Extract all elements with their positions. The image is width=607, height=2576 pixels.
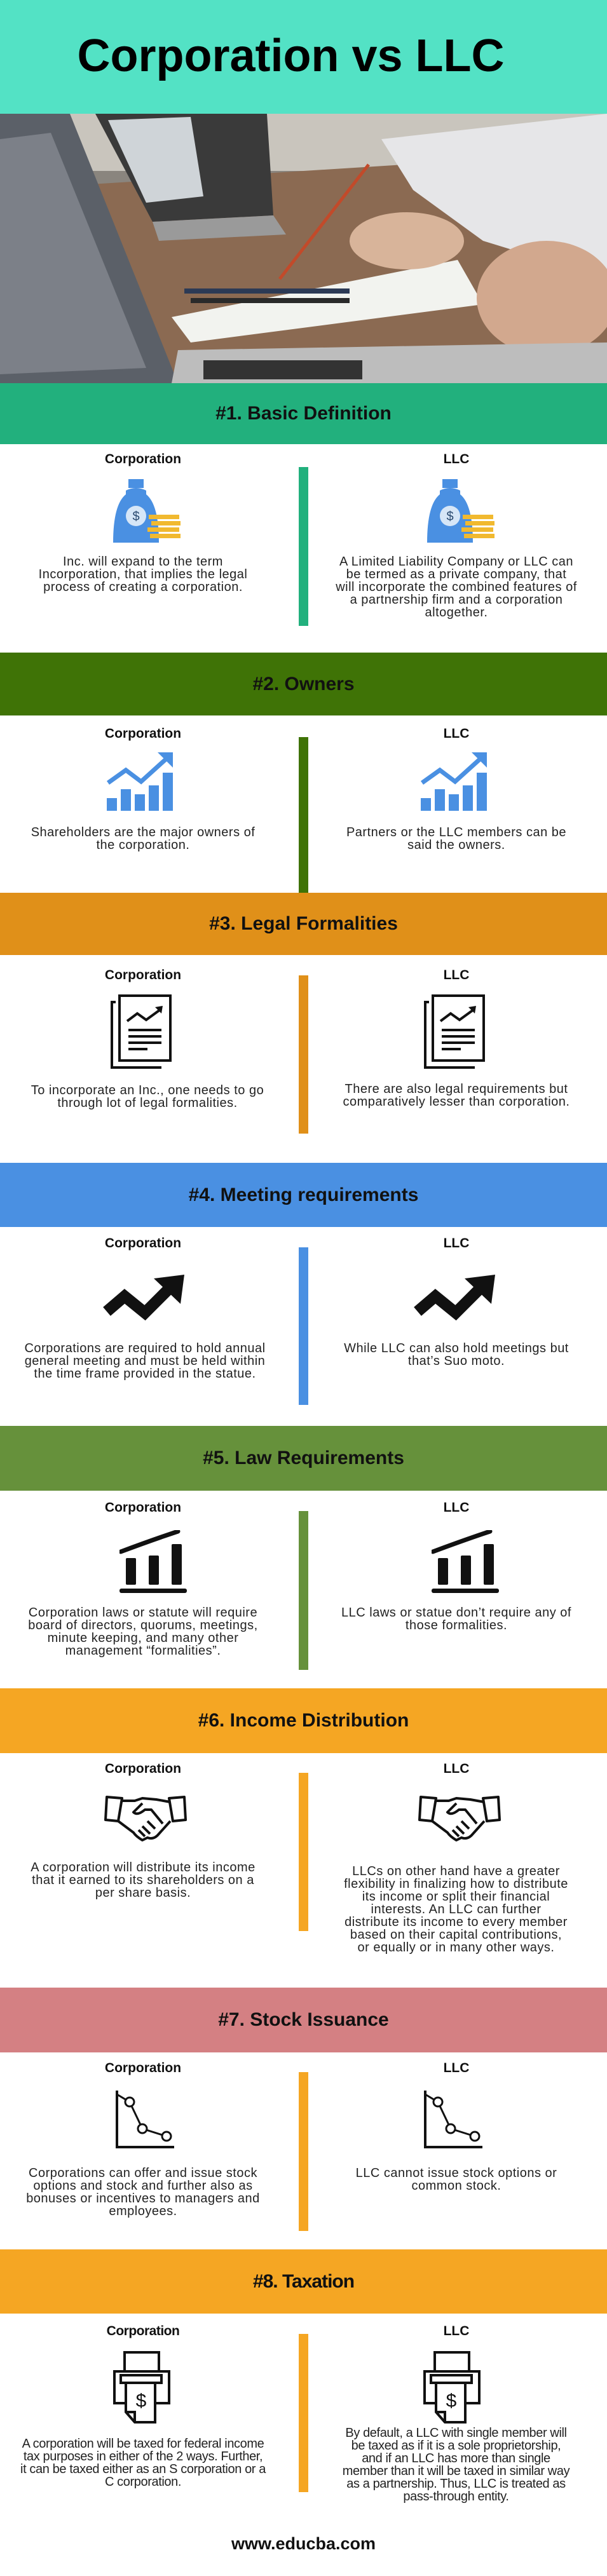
s3 divider bbox=[299, 975, 308, 1134]
s7 divider bbox=[299, 2072, 308, 2231]
s2 icon growth chart right bbox=[421, 752, 487, 811]
s1 icon money bag right: $ bbox=[446, 510, 454, 524]
s3 corporation text: To incorporate an Inc., one needs to go through lot of legal formalities. bbox=[31, 1083, 264, 1110]
section 2 band: #2. Owners bbox=[252, 674, 355, 694]
section 6 band: #6. Income Distribution bbox=[198, 1710, 409, 1731]
s5 corporation heading: Corporation bbox=[105, 1500, 181, 1515]
s7 icon declining chart left bbox=[116, 2091, 174, 2148]
s8 icon printer money left: $ bbox=[136, 2390, 147, 2411]
s7 corporation text: Corporations can offer and issue stock options and stock and further also as bonuses or incentives to managers and employees. bbox=[26, 2166, 260, 2218]
s6 icon handshake left bbox=[104, 1796, 187, 1841]
s7 llc text: LLC cannot issue stock options or common stock. bbox=[356, 2166, 557, 2193]
s7 icon declining chart right bbox=[424, 2091, 482, 2148]
s8 llc heading: LLC bbox=[444, 2324, 469, 2338]
section 6 band bbox=[0, 1688, 607, 1753]
s5 llc heading: LLC bbox=[444, 1500, 469, 1515]
section 7 band bbox=[0, 1988, 607, 2052]
s8 corporation text: A corporation will be taxed for federal income tax purposes in either of the 2 ways. Further, it can be taxed either as an S corporation or a C corporation. bbox=[20, 2437, 266, 2489]
s3 llc text: There are also legal requirements but comparatively lesser than corporation. bbox=[343, 1082, 569, 1109]
s6 corporation heading: Corporation bbox=[105, 1761, 181, 1776]
section 4 band: #4. Meeting requirements bbox=[189, 1184, 418, 1205]
section 1 band: #1. Basic Definition bbox=[215, 403, 392, 424]
s2 icon growth chart left bbox=[107, 752, 173, 811]
s4 llc text: While LLC can also hold meetings but that’s Suo moto. bbox=[344, 1341, 569, 1368]
s5 icon bar chart left bbox=[119, 1530, 187, 1593]
s4 divider bbox=[299, 1247, 308, 1405]
s8 llc text: By default, a LLC with single member will be taxed as if it is a sole proprietorship, and if an LLC has more than single member than it will be taxed in similar way as a partnership. Thus, LLC is treated as pass-through entity. bbox=[343, 2426, 569, 2504]
s7 corporation heading: Corporation bbox=[105, 2061, 181, 2075]
s8 icon printer money right: $ bbox=[446, 2390, 457, 2411]
section 5 band: #5. Law Requirements bbox=[203, 1447, 404, 1468]
s6 icon handshake right bbox=[418, 1796, 501, 1841]
s4 icon zigzag arrow left bbox=[103, 1275, 184, 1320]
s7 llc heading: LLC bbox=[444, 2061, 469, 2075]
s2 corporation text: Shareholders are the major owners of the corporation. bbox=[31, 825, 255, 852]
s8 divider bbox=[299, 2334, 308, 2492]
s5 llc text: LLC laws or statue don’t require any of those formalities. bbox=[341, 1606, 571, 1632]
section 5 band bbox=[0, 1426, 607, 1491]
section 7 band: #7. Stock Issuance bbox=[218, 2009, 389, 2030]
section 2 band bbox=[0, 653, 607, 715]
s1 icon money bag left: $ bbox=[132, 510, 140, 524]
s3 corporation heading: Corporation bbox=[105, 968, 181, 982]
s6 llc heading: LLC bbox=[444, 1761, 469, 1776]
s1 corporation heading: Corporation bbox=[105, 452, 181, 466]
section 1 band bbox=[0, 383, 607, 444]
s5 corporation text: Corporation laws or statute will require board of directors, quorums, meetings, minute keeping, and many other management “formalities”. bbox=[28, 1606, 258, 1658]
s2 llc text: Partners or the LLC members can be said the owners. bbox=[346, 825, 566, 852]
s4 llc heading: LLC bbox=[444, 1236, 469, 1251]
s8 icon printer money left bbox=[113, 2351, 170, 2423]
s6 divider bbox=[299, 1773, 308, 1931]
s1 llc heading: LLC bbox=[444, 452, 469, 466]
s1 llc text: A Limited Liability Company or LLC can be termed as a private company, that will incorporate the combined features of a partnership firm and a corporation altogether. bbox=[336, 555, 577, 620]
s5 icon bar chart right bbox=[432, 1530, 499, 1593]
s6 llc text: LLCs on other hand have a greater flexibility in finalizing how to distribute its income or split their financial interests. An LLC can further distribute its income to every member based on their capital contributions, or equally or in many other ways. bbox=[344, 1864, 568, 1955]
s3 llc heading: LLC bbox=[444, 968, 469, 982]
section 8 band: #8. Taxation bbox=[253, 2271, 354, 2291]
s8 icon printer money right bbox=[423, 2351, 481, 2423]
title band: Corporation vs LLC bbox=[77, 31, 505, 81]
s4 corporation text: Corporations are required to hold annual general meeting and must be held within the time frame provided in the statue. bbox=[24, 1341, 266, 1381]
s1 icon money bag left bbox=[113, 479, 181, 543]
section 3 band: #3. Legal Formalities bbox=[209, 913, 398, 934]
section 3 band bbox=[0, 893, 607, 955]
footer url: www.educba.com bbox=[231, 2534, 376, 2553]
s4 icon zigzag arrow right bbox=[414, 1275, 495, 1320]
s1 divider bbox=[299, 467, 308, 626]
s5 divider bbox=[299, 1511, 308, 1670]
s1 corporation text: Inc. will expand to the term Incorporation, that implies the legal process of creating a corporation. bbox=[39, 555, 247, 594]
s3 icon document right bbox=[424, 994, 485, 1069]
s8 corporation heading: Corporation bbox=[107, 2324, 179, 2338]
title band bbox=[0, 0, 607, 114]
s2 llc heading: LLC bbox=[444, 726, 469, 741]
section 8 band bbox=[0, 2249, 607, 2314]
s6 corporation text: A corporation will distribute its income that it earned to its shareholders on a per share basis. bbox=[31, 1861, 256, 1900]
s2 corporation heading: Corporation bbox=[105, 726, 181, 741]
s1 icon money bag right bbox=[427, 479, 494, 543]
photo: office desk bbox=[0, 114, 607, 383]
s3 icon document left bbox=[111, 994, 172, 1069]
s2 divider bbox=[299, 737, 308, 893]
s4 corporation heading: Corporation bbox=[105, 1236, 181, 1251]
section 4 band bbox=[0, 1163, 607, 1227]
